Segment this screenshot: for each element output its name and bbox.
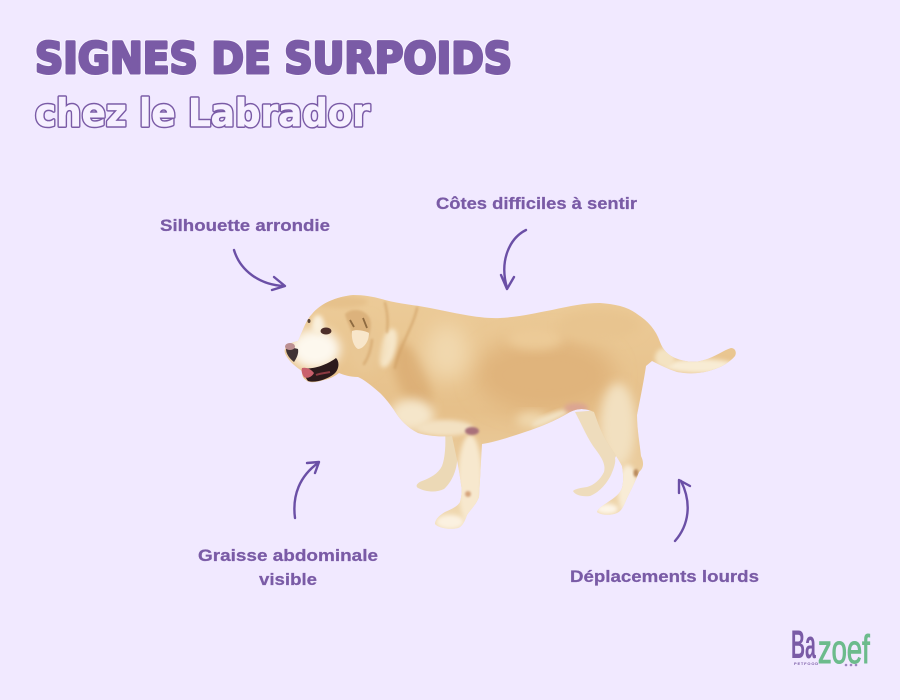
logo: Bazoef: zoef xyxy=(818,628,870,672)
nose xyxy=(285,343,298,362)
dog photo illustration xyxy=(285,295,736,529)
ear xyxy=(345,310,371,349)
title: SIGNES DE SURPOIDS xyxy=(35,34,512,84)
label: abdominal fat: Graisse abdominale xyxy=(198,546,378,565)
logo: Bazoef: Ba xyxy=(791,622,816,667)
label: abdominal fat: visible xyxy=(259,570,317,589)
fur shading xyxy=(290,296,736,529)
far hind leg xyxy=(573,410,625,496)
eye xyxy=(308,319,332,334)
label: heavy movement: Déplacements lourds xyxy=(570,567,759,586)
subtitle: chez le Labrador xyxy=(35,91,370,135)
main body xyxy=(285,295,736,529)
far front leg xyxy=(417,430,457,492)
logo: Bazoef xyxy=(791,622,870,672)
arrow: silhouette xyxy=(234,250,285,290)
label: ribs: Côtes difficiles à sentir xyxy=(436,194,637,213)
arrow: abdominal fat xyxy=(294,462,319,518)
label: abdominal fat xyxy=(198,546,378,589)
mouth and tongue xyxy=(302,358,338,382)
neck folds xyxy=(364,303,417,368)
wound marks xyxy=(465,427,479,435)
arrow: heavy movement xyxy=(675,480,690,541)
title: SIGNES DE SURPOIDS xyxy=(35,34,512,84)
arrow: ribs xyxy=(501,230,526,289)
subtitle: chez le Labrador xyxy=(35,91,370,135)
logo: Bazoef: PETFOOD xyxy=(794,661,819,666)
label: silhouette: Silhouette arrondie xyxy=(160,216,330,235)
